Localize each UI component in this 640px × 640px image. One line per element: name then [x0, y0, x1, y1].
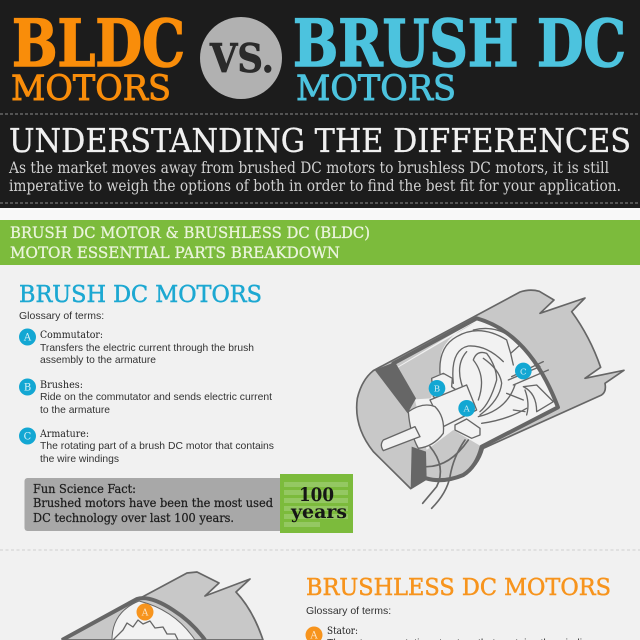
term A: stator: Stator:: [327, 625, 358, 637]
illustration: brush DC motor: [357, 290, 624, 508]
badge: 100 years: years: [290, 501, 347, 523]
term A: commutator: assembly to the armature: [40, 355, 156, 366]
brush and shaft assembly: [432, 373, 472, 410]
term A: commutator: A: [23, 332, 32, 344]
marker A: [458, 400, 475, 417]
dark rim: [62, 598, 205, 640]
callout: fun science fact: [24, 474, 353, 533]
marker A: A: [463, 405, 471, 415]
badge: 100 years: 100: [299, 484, 334, 506]
dark end ring: [375, 362, 416, 413]
gray interior wall: [397, 323, 475, 399]
term B: brushes: Ride on the commutator and sends electric current: [40, 392, 272, 403]
term C: armature: Armature:: [39, 428, 89, 440]
glossary label: Glossary of terms:: [19, 310, 104, 322]
panel: brushless DC glossary: [306, 575, 611, 640]
vs. badge: VS.: [209, 36, 274, 82]
marker C: [515, 363, 532, 379]
motor housing: [357, 290, 624, 489]
term C: armature: the wire windings: [40, 454, 119, 465]
title: brush DC motors: MOTORS: [296, 69, 456, 109]
callout: fun science fact: Brushed motors have been the most used: [33, 496, 273, 510]
windings: [440, 328, 553, 423]
heading: brushless DC motors: BRUSHLESS DC MOTORS: [306, 575, 611, 601]
term B: brushes: Brushes:: [40, 379, 83, 391]
rotor teeth: [113, 620, 178, 640]
vs. badge: [200, 17, 282, 99]
term B: brushes: to the armature: [40, 405, 110, 416]
section banner: BRUSH DC MOTOR & BRUSHLESS DC (BLDC): [10, 223, 370, 242]
marker A: A: [141, 608, 149, 618]
section banner: MOTOR ESSENTIAL PARTS BREAKDOWN: [10, 243, 340, 262]
motor window: [397, 319, 557, 450]
term A: commutator: Transfers the electric current through the brush: [40, 343, 254, 354]
title: BLDC motors: [11, 6, 185, 109]
dark window rim: [393, 318, 558, 480]
wires: [423, 440, 468, 508]
panel: brush DC glossary: [19, 282, 274, 465]
term A: commutator: [19, 328, 254, 366]
marker B: B: [434, 385, 440, 395]
intro text: [8, 159, 621, 195]
section banner: [0, 220, 640, 265]
glossary label: Glossary of terms:: [306, 605, 391, 617]
heading: brush DC motors: BRUSH DC MOTORS: [19, 282, 262, 308]
term B: brushes: [19, 378, 272, 416]
stator interior: [112, 601, 195, 640]
callout: fun science fact: Fun Science Fact:: [33, 482, 136, 496]
term C: armature: The rotating part of a brush DC motor that contains: [40, 441, 274, 452]
callout: fun science fact: DC technology over last 100 years.: [33, 511, 234, 525]
term C: armature: C: [24, 432, 32, 442]
term A: stator: [306, 625, 599, 640]
marker B: [429, 380, 445, 397]
term C: armature: [19, 428, 274, 465]
marker A: [136, 604, 154, 620]
header panel: [0, 0, 640, 208]
title: BLDC motors: BLDC: [12, 6, 185, 82]
housing: [62, 572, 263, 640]
illustration: brushless DC motor: [62, 572, 263, 640]
title: BLDC motors: MOTORS: [11, 69, 171, 109]
term B: brushes: B: [24, 382, 31, 394]
badge: 100 years: [280, 474, 353, 533]
term A: commutator: Commutator:: [40, 329, 103, 341]
marker C: C: [520, 367, 527, 377]
